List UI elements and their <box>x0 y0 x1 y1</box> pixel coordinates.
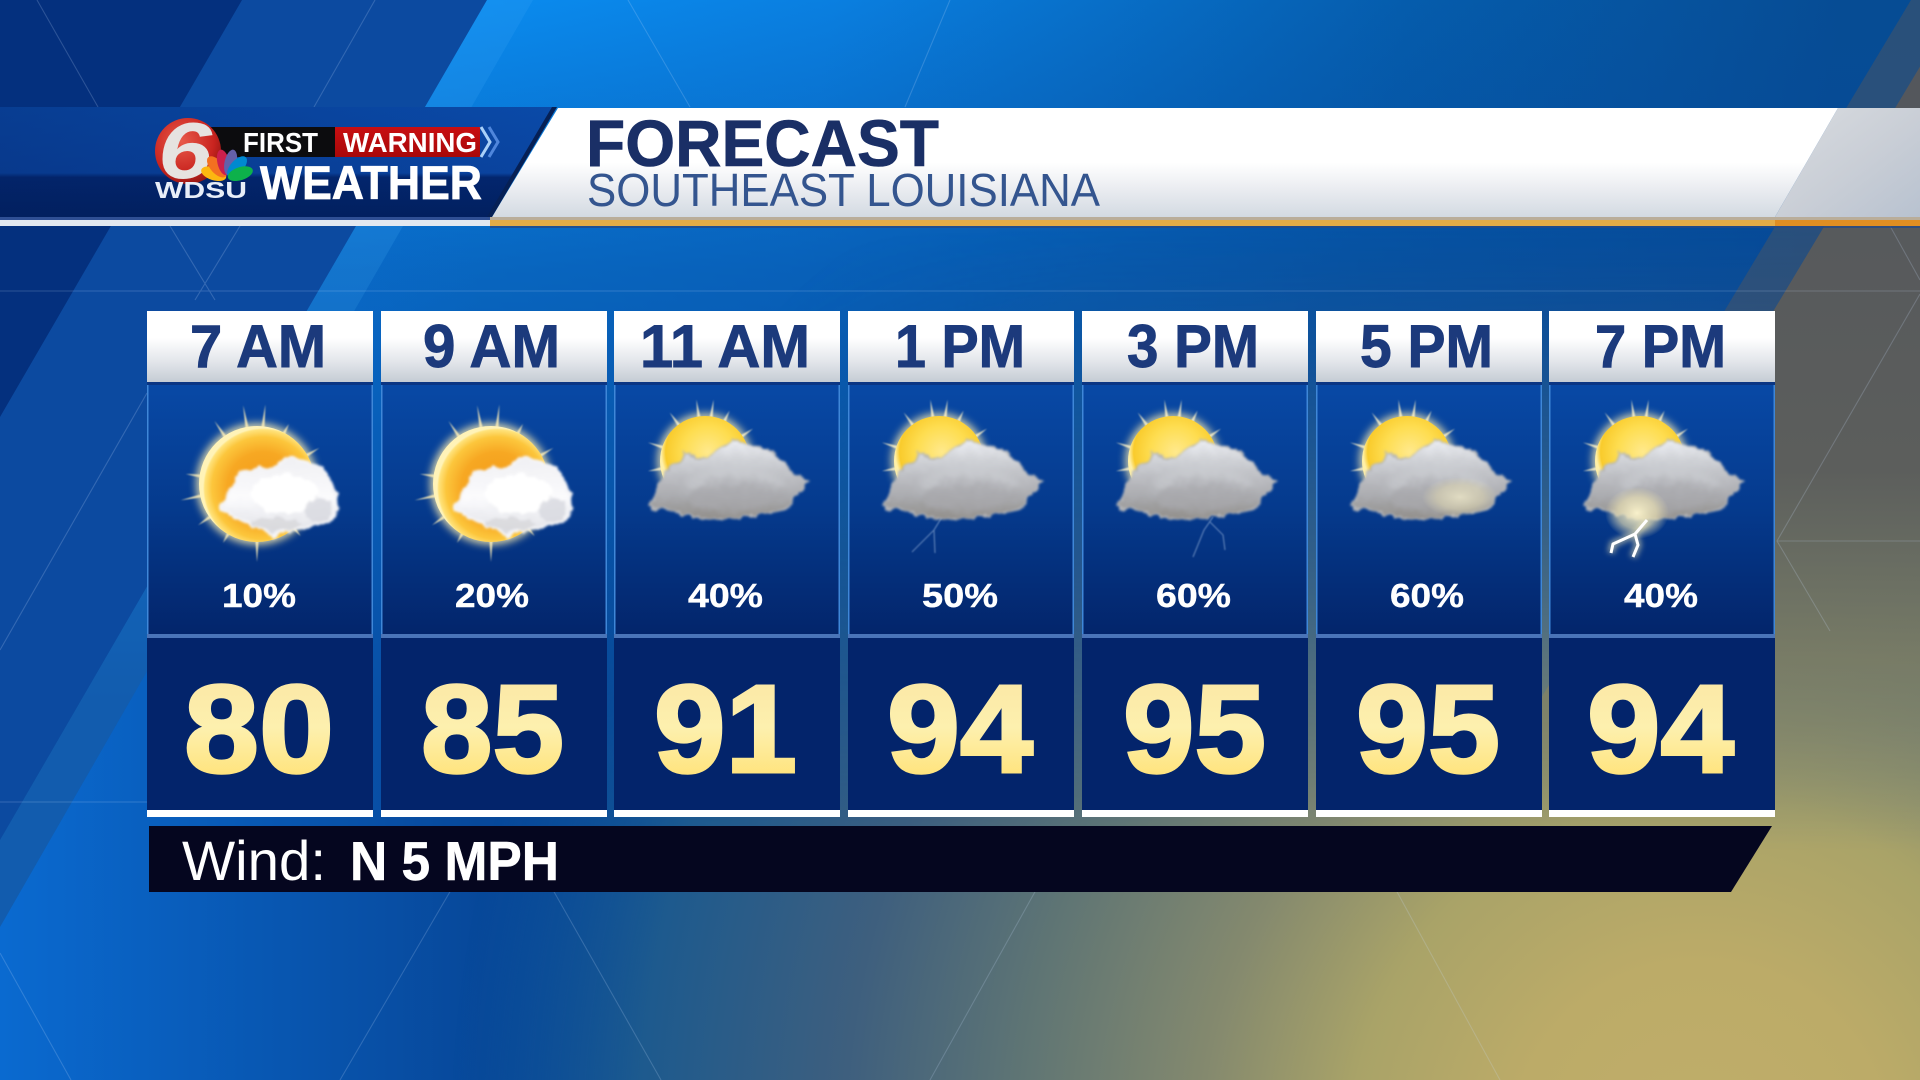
station panel <box>0 107 557 217</box>
time header <box>848 311 1074 382</box>
heading: FORECAST: FORECAST <box>586 106 939 180</box>
icon: sun, cloud, faint lightning <box>881 399 1043 553</box>
wind label: Wind: <box>182 829 326 892</box>
title banner <box>0 106 1920 228</box>
temperature panel: 80 <box>184 660 334 799</box>
temperature panel <box>848 634 1074 817</box>
time header: 5 PM <box>1360 313 1493 380</box>
time header: 11 AM <box>640 313 810 380</box>
time header <box>1316 311 1542 382</box>
rain chance: 60% <box>1156 577 1231 614</box>
column: 5 PM <box>1316 311 1542 817</box>
WDSU: WDSU <box>155 177 247 203</box>
rain chance: 10% <box>222 577 296 614</box>
FIRST black bar <box>205 127 335 158</box>
time header <box>147 311 373 382</box>
temperature panel: 95 <box>1356 660 1500 799</box>
column: 7 PM <box>1549 311 1775 817</box>
column: 3 PM <box>1082 311 1308 817</box>
temperature panel: 95 <box>1123 660 1266 799</box>
temperature panel <box>381 634 607 817</box>
banner stripes <box>0 217 1920 228</box>
icon: sun, cloud, faint lightning <box>1115 399 1277 557</box>
banner right translucent end <box>1775 108 1920 217</box>
wind value: N 5 MPH <box>350 830 559 892</box>
icon: sun behind grey cloud <box>647 399 809 520</box>
time header: 7 AM <box>190 313 326 380</box>
panel <box>1316 382 1542 634</box>
FIRST black bar: FIRST <box>243 127 318 158</box>
time header <box>381 311 607 382</box>
panel <box>848 382 1074 634</box>
temperature panel <box>614 634 840 817</box>
column: 9 AM <box>381 311 607 817</box>
column: 1 PM <box>848 311 1074 817</box>
temperature panel <box>1549 634 1775 817</box>
icon: sun, cloud with inner glow <box>1349 399 1511 520</box>
channel 6 circle: 6 <box>158 106 213 195</box>
temperature panel <box>1316 634 1542 817</box>
temperature panel: 85 <box>421 660 564 799</box>
subheading: SOUTHEAST LOUISIANA: SOUTHEAST LOUISIANA <box>587 164 1100 216</box>
time header <box>1549 311 1775 382</box>
column: 11 AM <box>614 311 840 817</box>
temperature panel: 94 <box>1587 660 1734 799</box>
chevrons <box>481 127 498 157</box>
temperature panel <box>147 634 373 817</box>
time header: 9 AM <box>423 313 560 380</box>
icon: NBC peacock <box>199 148 255 184</box>
rain chance: 60% <box>1390 577 1464 614</box>
column: 7 AM <box>147 311 373 817</box>
panel <box>147 382 373 634</box>
rain chance: 40% <box>1624 577 1698 614</box>
rain chance: 40% <box>688 577 763 614</box>
panel <box>1549 382 1775 634</box>
panel <box>614 382 840 634</box>
station logo <box>155 106 498 209</box>
time header: 7 PM <box>1595 313 1726 380</box>
icon: sun with white cloud <box>414 404 572 562</box>
icon: sun with white cloud <box>180 404 338 562</box>
time header <box>1082 311 1308 382</box>
icon: sun, cloud, bright lightning <box>1582 399 1744 557</box>
channel 6 circle <box>155 106 221 195</box>
panel <box>381 382 607 634</box>
temperature panel: 94 <box>887 660 1033 799</box>
time header: 1 PM <box>895 313 1025 380</box>
time header: 3 PM <box>1127 313 1259 380</box>
banner white band <box>492 108 1838 217</box>
wind bar <box>149 826 1772 892</box>
panel <box>1082 382 1308 634</box>
rain chance: 50% <box>922 577 998 614</box>
temperature panel <box>1082 634 1308 817</box>
temperature panel: 91 <box>654 660 797 799</box>
WARNING red bar: WARNING <box>343 127 477 158</box>
rain chance: 20% <box>455 577 529 614</box>
WEATHER: WEATHER <box>260 156 482 209</box>
